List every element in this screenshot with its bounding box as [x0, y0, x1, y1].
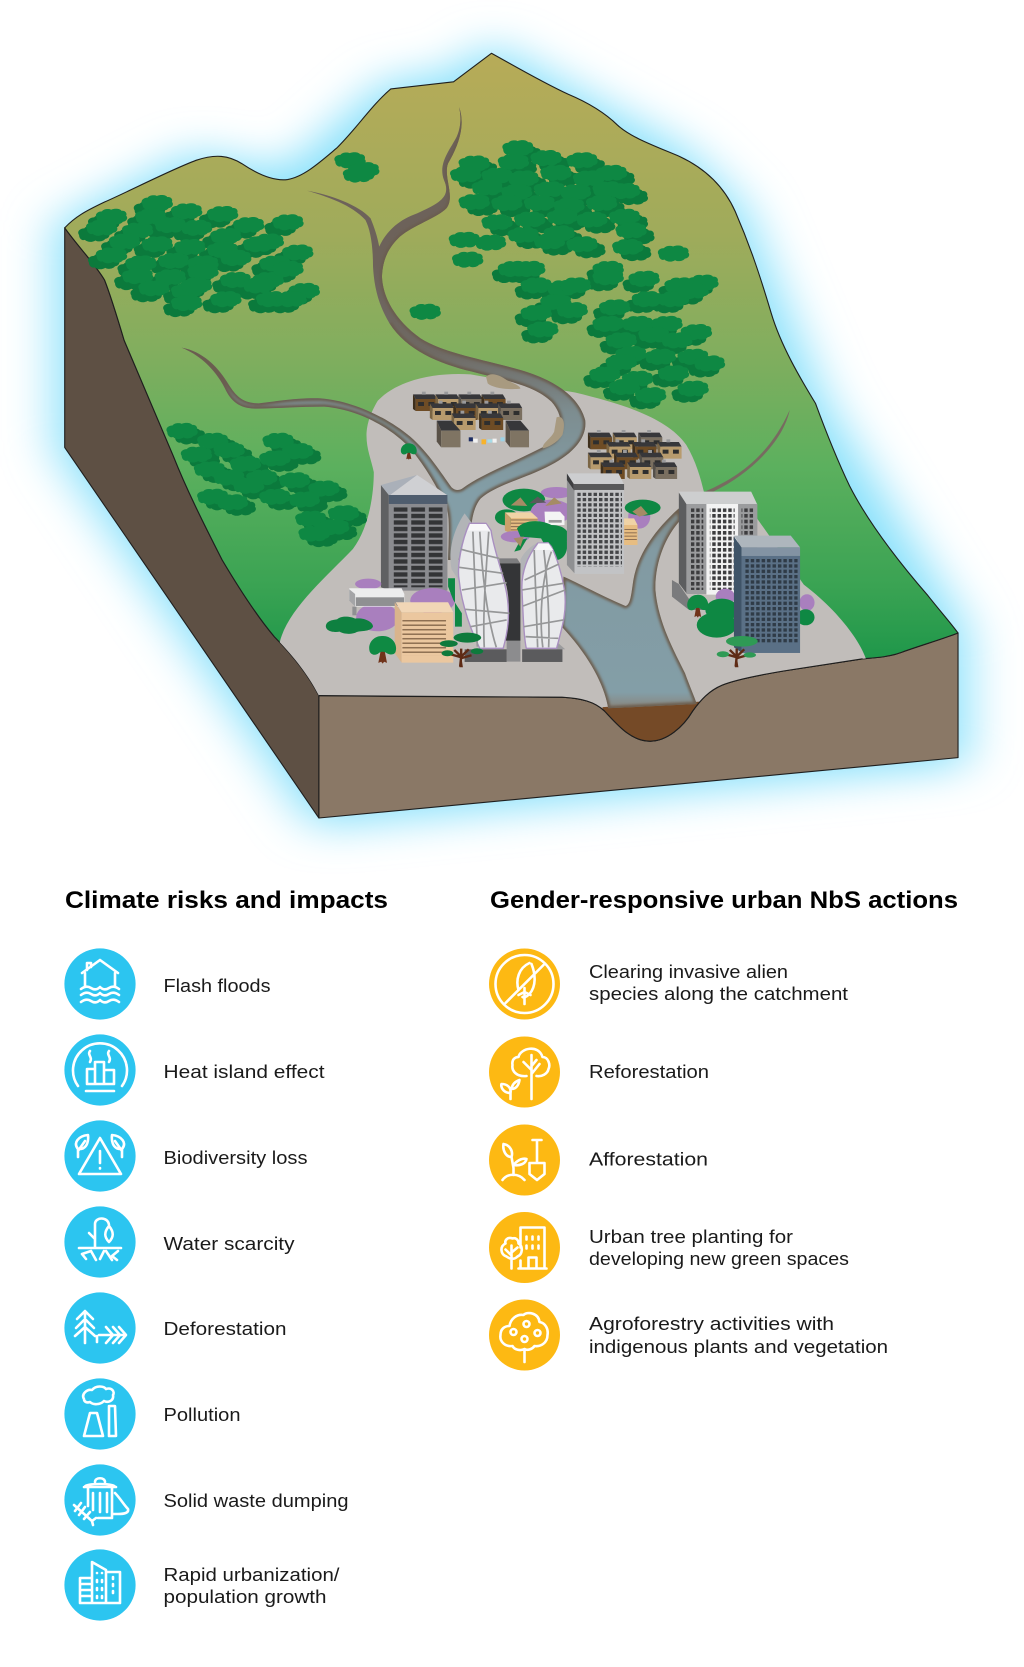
purple flowering trees left	[355, 579, 455, 631]
forest cluster southwest	[166, 423, 367, 547]
action: reforestation	[489, 1036, 709, 1108]
action: afforestation	[489, 1124, 708, 1196]
mid grey tower	[567, 473, 624, 574]
icon: tree next to building	[489, 1212, 560, 1283]
icon: city under heat dome	[64, 1034, 136, 1106]
right tributary stream	[705, 410, 790, 492]
low white building	[349, 588, 404, 615]
beige office block	[395, 602, 453, 663]
icon: fruit tree	[489, 1300, 560, 1370]
label: Heat island effect	[164, 1061, 324, 1082]
icon: warning triangle with leaves	[64, 1120, 136, 1192]
icon: wilted plant with roots	[64, 1206, 136, 1278]
label: Deforestation	[164, 1318, 286, 1339]
risk: deforestation	[64, 1292, 287, 1364]
icon: house in flood	[64, 948, 136, 1020]
label: Reforestation	[589, 1061, 709, 1082]
risk: flash floods	[64, 948, 271, 1020]
icon: standing and felled tree	[64, 1292, 136, 1364]
green strip by towers	[448, 578, 462, 627]
label: species along the catchment	[589, 983, 848, 1004]
forest cluster northwest	[78, 195, 320, 317]
lower river channel	[562, 508, 697, 708]
icon: tree and sapling	[489, 1036, 560, 1108]
label	[164, 1564, 340, 1607]
icon: smokestack and cloud	[64, 1378, 136, 1450]
risk: heat island effect	[64, 1034, 325, 1106]
blue glow behind terrain	[65, 53, 958, 818]
label	[589, 961, 848, 1004]
upper river and tributaries	[182, 108, 586, 560]
icon: city buildings	[64, 1549, 136, 1621]
forest cluster small top	[334, 152, 379, 183]
risk: biodiversity loss	[64, 1120, 308, 1192]
action: clearing invasive alien species	[489, 948, 848, 1020]
twin towers base	[465, 640, 565, 662]
forest cluster northeast	[450, 140, 655, 261]
muddy river mouth	[602, 702, 700, 741]
upper housing cluster	[413, 392, 529, 447]
risk: pollution	[64, 1378, 241, 1450]
heading: gender-responsive urban NbS actions: Gender-responsive urban NbS actions	[490, 887, 958, 914]
forest cluster east	[492, 261, 725, 409]
terrain edge line over the river mouth	[319, 659, 863, 741]
grey swooshes behind towers	[450, 513, 539, 580]
label: indigenous plants and vegetation	[589, 1336, 888, 1357]
blue tower	[734, 536, 800, 653]
sediment bank top	[486, 374, 520, 389]
terrain block illustration	[65, 53, 958, 818]
action: agroforestry	[489, 1300, 888, 1370]
action: urban tree planting	[489, 1212, 849, 1283]
grey urban land	[280, 374, 866, 708]
left cliff face	[65, 228, 319, 818]
city and rivers	[162, 93, 815, 713]
label: Urban tree planting for	[589, 1226, 793, 1247]
right twisted tower	[522, 543, 565, 648]
icon: sprout and shovel	[489, 1124, 560, 1196]
label: Rapid urbanization/	[164, 1564, 340, 1585]
green shrub left	[326, 617, 373, 634]
front soil face	[319, 633, 958, 818]
label: Biodiversity loss	[164, 1147, 308, 1168]
label	[589, 1313, 888, 1357]
label	[589, 1226, 849, 1269]
label: Pollution	[164, 1404, 240, 1425]
flat canopy tree right	[717, 636, 758, 667]
label: Water scarcity	[164, 1233, 295, 1254]
right white and grey tower	[672, 492, 757, 610]
round tree by beige block	[369, 636, 396, 664]
small tree near river	[401, 443, 417, 460]
left twisted tower	[459, 523, 509, 648]
label: Clearing invasive alien	[589, 961, 788, 982]
label: developing new green spaces	[589, 1248, 849, 1269]
risk: rapid urbanization	[64, 1549, 340, 1621]
forest clusters	[78, 140, 725, 547]
gardens behind mid tower	[495, 487, 661, 560]
label: Flash floods	[164, 975, 270, 996]
left grey tower	[381, 475, 447, 591]
sediment bank right	[543, 417, 564, 448]
label: Agroforestry activities with	[589, 1313, 834, 1334]
hillside green surface	[65, 53, 958, 741]
label: population growth	[164, 1586, 326, 1607]
right housing cluster	[588, 430, 682, 479]
label: Solid waste dumping	[164, 1490, 348, 1511]
central dark core	[499, 558, 520, 641]
heading: climate risks and impacts: Climate risks and impacts	[65, 887, 388, 914]
icon: crossed out leaf	[489, 948, 560, 1020]
right garden bushes	[697, 589, 815, 638]
small round tree at tower	[687, 595, 708, 618]
flat canopy tree front of towers	[440, 633, 483, 667]
icon: trash bin and fish bone	[64, 1464, 136, 1536]
forest outliers northeast	[410, 232, 689, 320]
risk: solid waste dumping	[64, 1464, 349, 1536]
label: Afforestation	[589, 1148, 708, 1170]
risk: water scarcity	[64, 1206, 295, 1278]
